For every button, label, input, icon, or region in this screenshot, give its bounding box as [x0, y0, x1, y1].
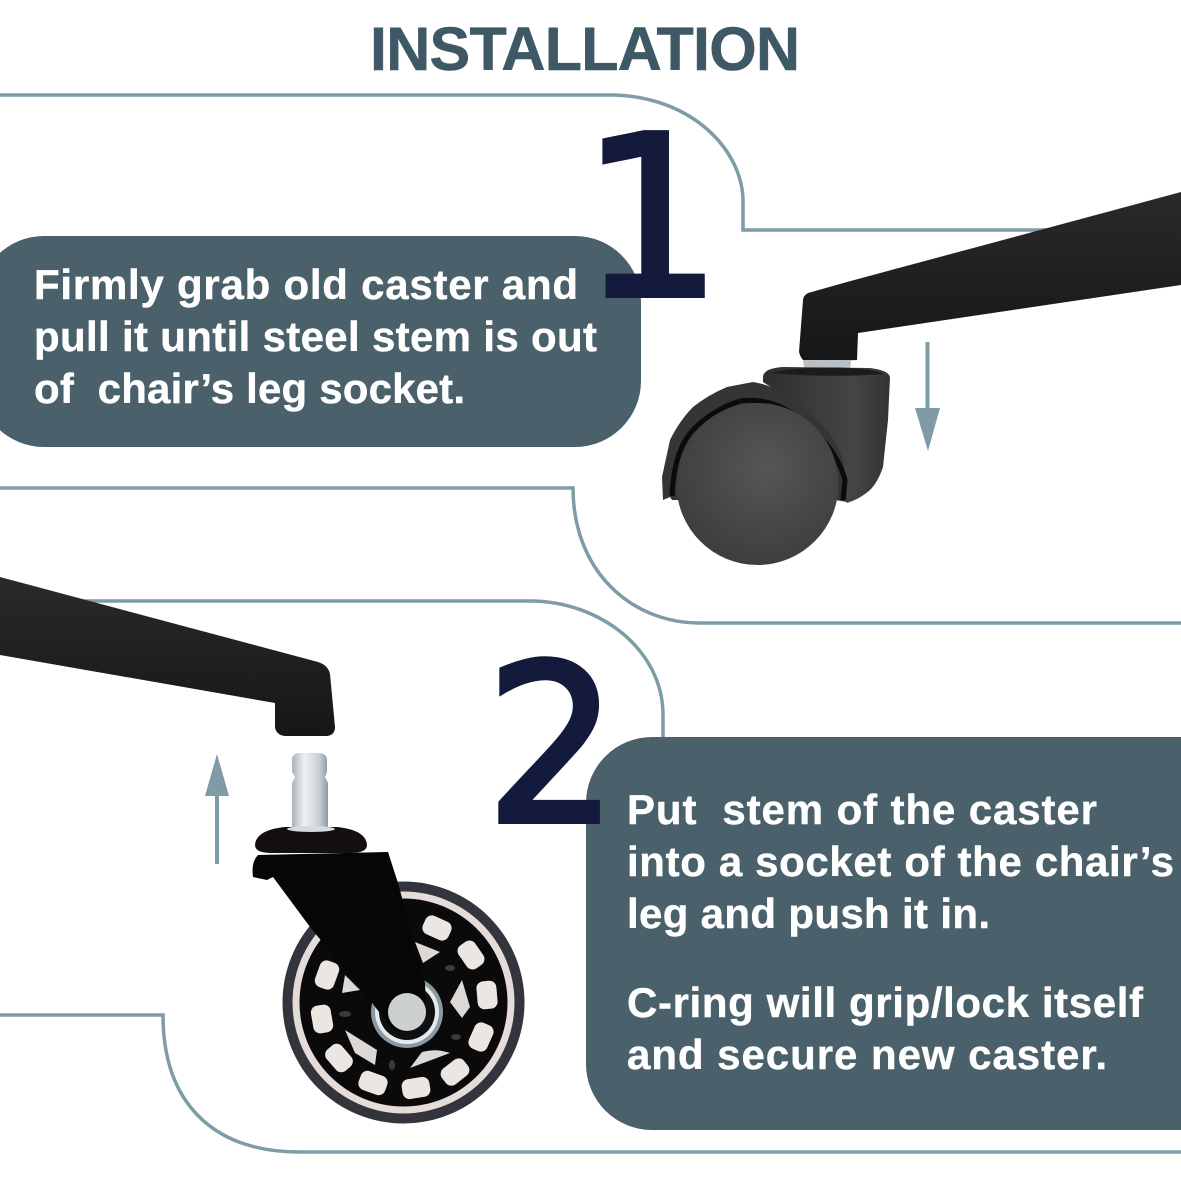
number 2: 2	[486, 620, 618, 873]
chair leg	[799, 192, 1181, 362]
title: INSTALLATION	[370, 15, 800, 83]
spoke openings	[342, 942, 470, 1068]
outline: step 2 bottom	[0, 1015, 1181, 1152]
number 1: 1	[581, 90, 722, 348]
step 2 text: leg and push it in.	[627, 890, 990, 937]
step 2 text: Put stem of the caster	[627, 786, 1097, 833]
panel: step 2 instructions	[586, 737, 1181, 1130]
bracket	[253, 852, 426, 1032]
hub cap	[388, 993, 426, 1031]
step 1 text: Firmly grab old caster and	[34, 261, 578, 308]
housing rim	[770, 368, 884, 376]
illustration: old caster on chair leg	[662, 192, 1181, 565]
flange	[255, 826, 367, 853]
chair leg	[0, 577, 335, 736]
step 2 text: and secure new caster.	[627, 1031, 1107, 1078]
housing	[763, 367, 890, 503]
arrow: push up	[205, 754, 229, 864]
arrow: pull down	[915, 342, 940, 451]
hood	[662, 382, 847, 502]
chrome ring	[371, 976, 443, 1048]
panel: step 1 instructions	[0, 236, 641, 447]
spoke studs	[339, 965, 461, 1070]
step 1 text	[34, 261, 597, 412]
outline: step 1 top	[0, 95, 1060, 230]
wheel	[676, 403, 838, 565]
groove	[672, 400, 845, 500]
step 2 text: C-ring will grip/lock itself	[627, 979, 1144, 1026]
wheel	[282, 882, 524, 1124]
illustration: new caster	[0, 577, 524, 1124]
wheel windows	[310, 913, 498, 1100]
step 1 text: pull it until steel stem is out	[34, 313, 597, 360]
steel stem	[292, 753, 328, 827]
step 1 text: of chair’s leg socket.	[34, 365, 465, 412]
step 2 text: into a socket of the chair’s	[627, 838, 1174, 885]
outline: step 1 bottom	[0, 488, 1181, 623]
step 2 text	[627, 786, 1174, 1078]
outline: step 2 top	[80, 601, 663, 740]
steel stem	[803, 360, 851, 372]
